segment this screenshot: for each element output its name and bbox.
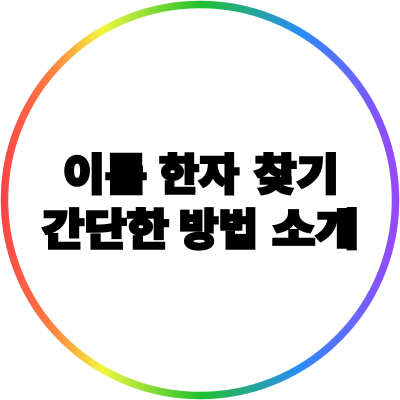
- title line 1: [63, 152, 339, 200]
- title line 2: 간단한: [42, 207, 169, 255]
- title line 1: 이름: [63, 152, 147, 200]
- title line 2: 소개: [272, 207, 359, 255]
- title line 2: 방법: [179, 207, 258, 255]
- title line 2: [42, 207, 359, 255]
- title line 1: 한자: [159, 152, 239, 200]
- title line 1: 찾기: [254, 152, 339, 200]
- title: [42, 152, 359, 255]
